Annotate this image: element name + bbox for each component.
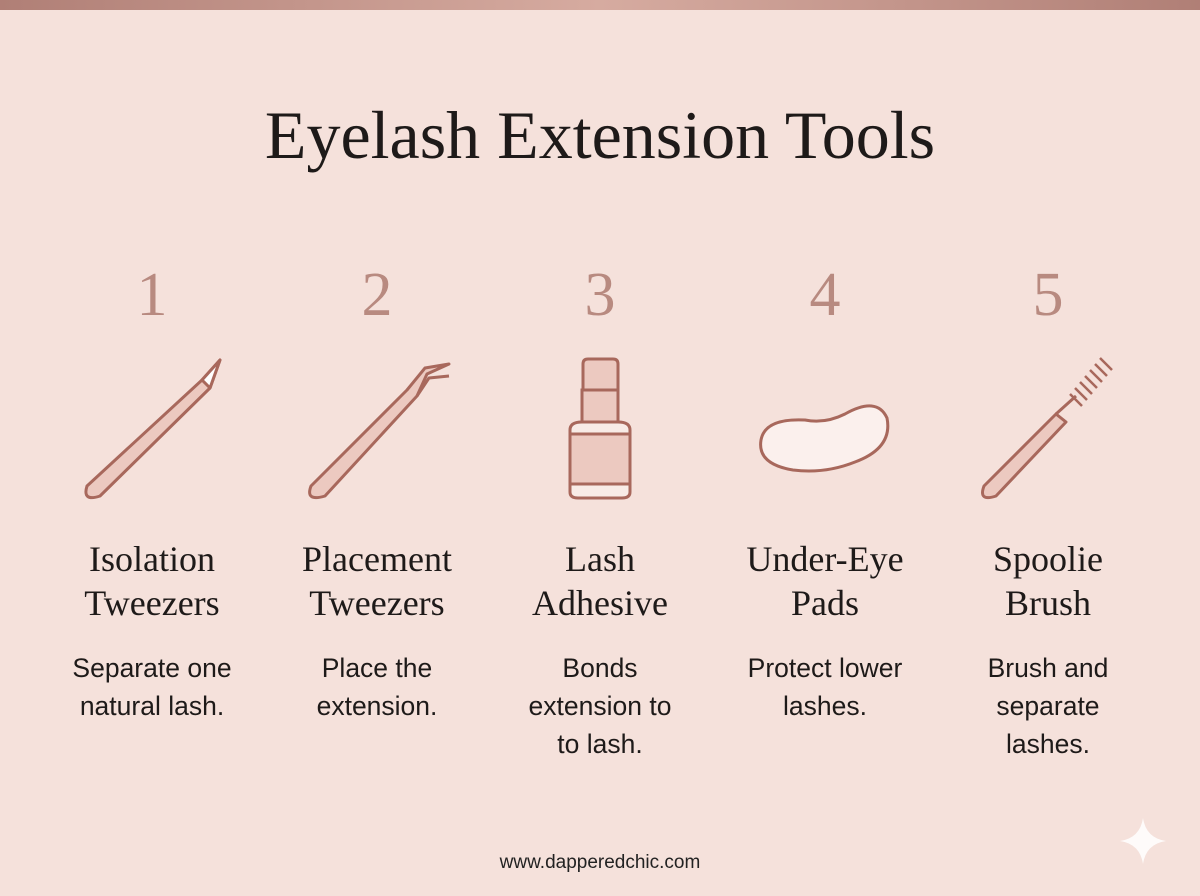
description: Bonds bbox=[562, 653, 638, 683]
label: Isolation bbox=[89, 539, 215, 579]
number 1: 1 bbox=[136, 261, 168, 329]
description bbox=[317, 653, 437, 721]
label: Under-Eye bbox=[746, 539, 904, 579]
description: lashes. bbox=[1006, 729, 1090, 759]
description: Place the bbox=[322, 653, 432, 683]
number 5: 5 bbox=[1032, 261, 1064, 329]
label: Brush bbox=[1005, 583, 1091, 623]
icon: adhesive bottle bbox=[568, 358, 632, 500]
label: Lash bbox=[565, 539, 635, 579]
number 3: 3 bbox=[584, 261, 616, 329]
description: extension. bbox=[317, 691, 437, 721]
column 4 bbox=[746, 261, 904, 721]
label bbox=[993, 539, 1103, 623]
title: Eyelash Extension Tools bbox=[265, 97, 935, 173]
description: separate bbox=[996, 691, 1100, 721]
label: Pads bbox=[791, 583, 859, 623]
icon: isolation tweezers bbox=[84, 358, 222, 500]
label: Tweezers bbox=[309, 583, 445, 623]
description: to lash. bbox=[557, 729, 643, 759]
description: Protect lower bbox=[748, 653, 902, 683]
column 2 bbox=[302, 261, 452, 721]
number 4: 4 bbox=[810, 261, 840, 329]
label bbox=[746, 539, 904, 623]
description: Separate one bbox=[72, 653, 232, 683]
label bbox=[532, 539, 668, 623]
description: natural lash. bbox=[80, 691, 224, 721]
description bbox=[72, 653, 232, 721]
label: Tweezers bbox=[84, 583, 220, 623]
column 3 bbox=[529, 261, 671, 759]
description bbox=[748, 653, 902, 721]
description: lashes. bbox=[783, 691, 867, 721]
footer url: www.dapperedchic.com bbox=[500, 852, 700, 873]
icon: under-eye pad bbox=[759, 404, 890, 472]
description: Brush and bbox=[988, 653, 1108, 683]
icon: placement tweezers bbox=[308, 362, 450, 500]
icon: spoolie brush bbox=[981, 357, 1113, 500]
description: extension to bbox=[529, 691, 671, 721]
description bbox=[988, 653, 1108, 759]
description bbox=[529, 653, 671, 759]
number 2: 2 bbox=[362, 261, 392, 329]
label: Adhesive bbox=[532, 583, 668, 623]
label bbox=[302, 539, 452, 623]
label: Spoolie bbox=[993, 539, 1103, 579]
column 1 bbox=[72, 261, 232, 721]
label: Placement bbox=[302, 539, 452, 579]
column 5 bbox=[981, 261, 1113, 759]
icon: sparkle bbox=[1120, 818, 1166, 864]
label bbox=[84, 539, 220, 623]
